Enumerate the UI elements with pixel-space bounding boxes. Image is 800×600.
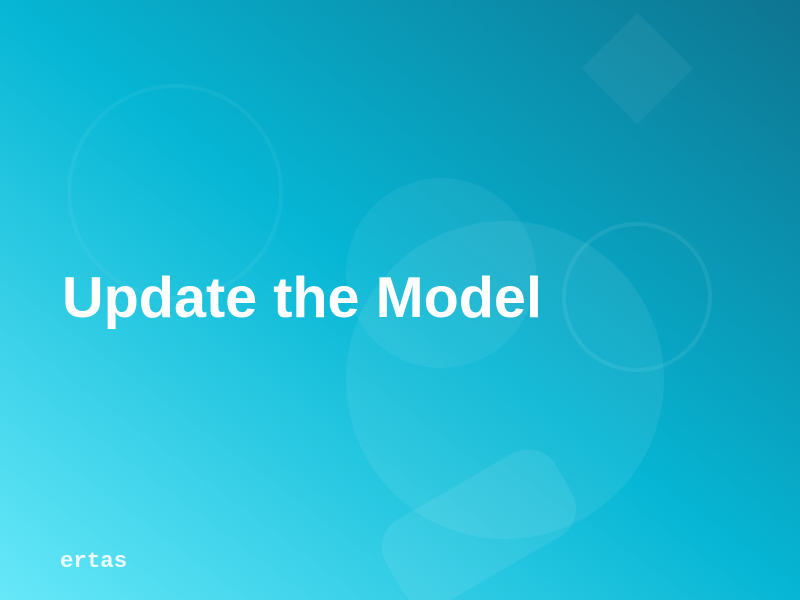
decorative circle: small center <box>346 178 536 368</box>
title: Update the Model <box>62 266 542 330</box>
logo wordmark: ertas <box>60 548 127 574</box>
decorative diamond: top right <box>581 13 693 124</box>
decorative circle: large center <box>346 221 664 539</box>
decorative rounded rectangle: bottom <box>370 437 588 600</box>
decorative ring: right <box>562 222 712 372</box>
decorative ring: top left <box>67 84 283 300</box>
